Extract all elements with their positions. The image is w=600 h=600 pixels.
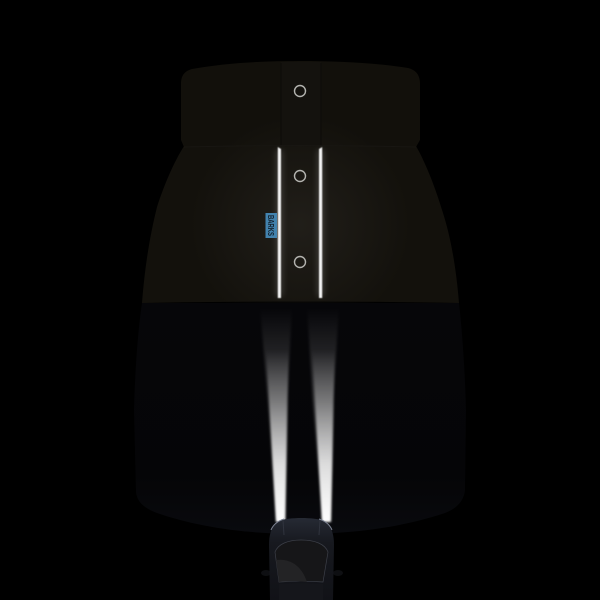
- strip: left: [278, 147, 281, 298]
- car: hood creases: [283, 520, 320, 535]
- coat: collar seam: [184, 146, 416, 147]
- coat: lower shaded section: [134, 303, 466, 534]
- strip glow: [276, 150, 324, 296]
- reflective strips: [276, 147, 324, 298]
- headlight beam: left: [260, 308, 292, 522]
- car: mirrors: [261, 570, 271, 576]
- strip: right: [319, 147, 322, 298]
- snap: middle: [294, 170, 306, 182]
- car: roof: [279, 583, 323, 600]
- brand label: BARKS: [266, 215, 275, 236]
- car: hood highlights: [271, 519, 332, 530]
- car: body: [269, 518, 334, 600]
- dog coat: [134, 61, 466, 534]
- brand label: [266, 213, 277, 238]
- car: [261, 518, 343, 600]
- snap: bottom: [294, 256, 306, 268]
- headlight beam: right: [307, 308, 339, 522]
- snap: top: [294, 86, 306, 96]
- coat: centre glow: [185, 110, 415, 303]
- coat: centre placket: [281, 62, 321, 146]
- car: windshield: [275, 540, 328, 582]
- car: windshield reflection: [276, 560, 307, 582]
- coat: upper lit section: [142, 146, 459, 303]
- coat: collar: [181, 61, 420, 147]
